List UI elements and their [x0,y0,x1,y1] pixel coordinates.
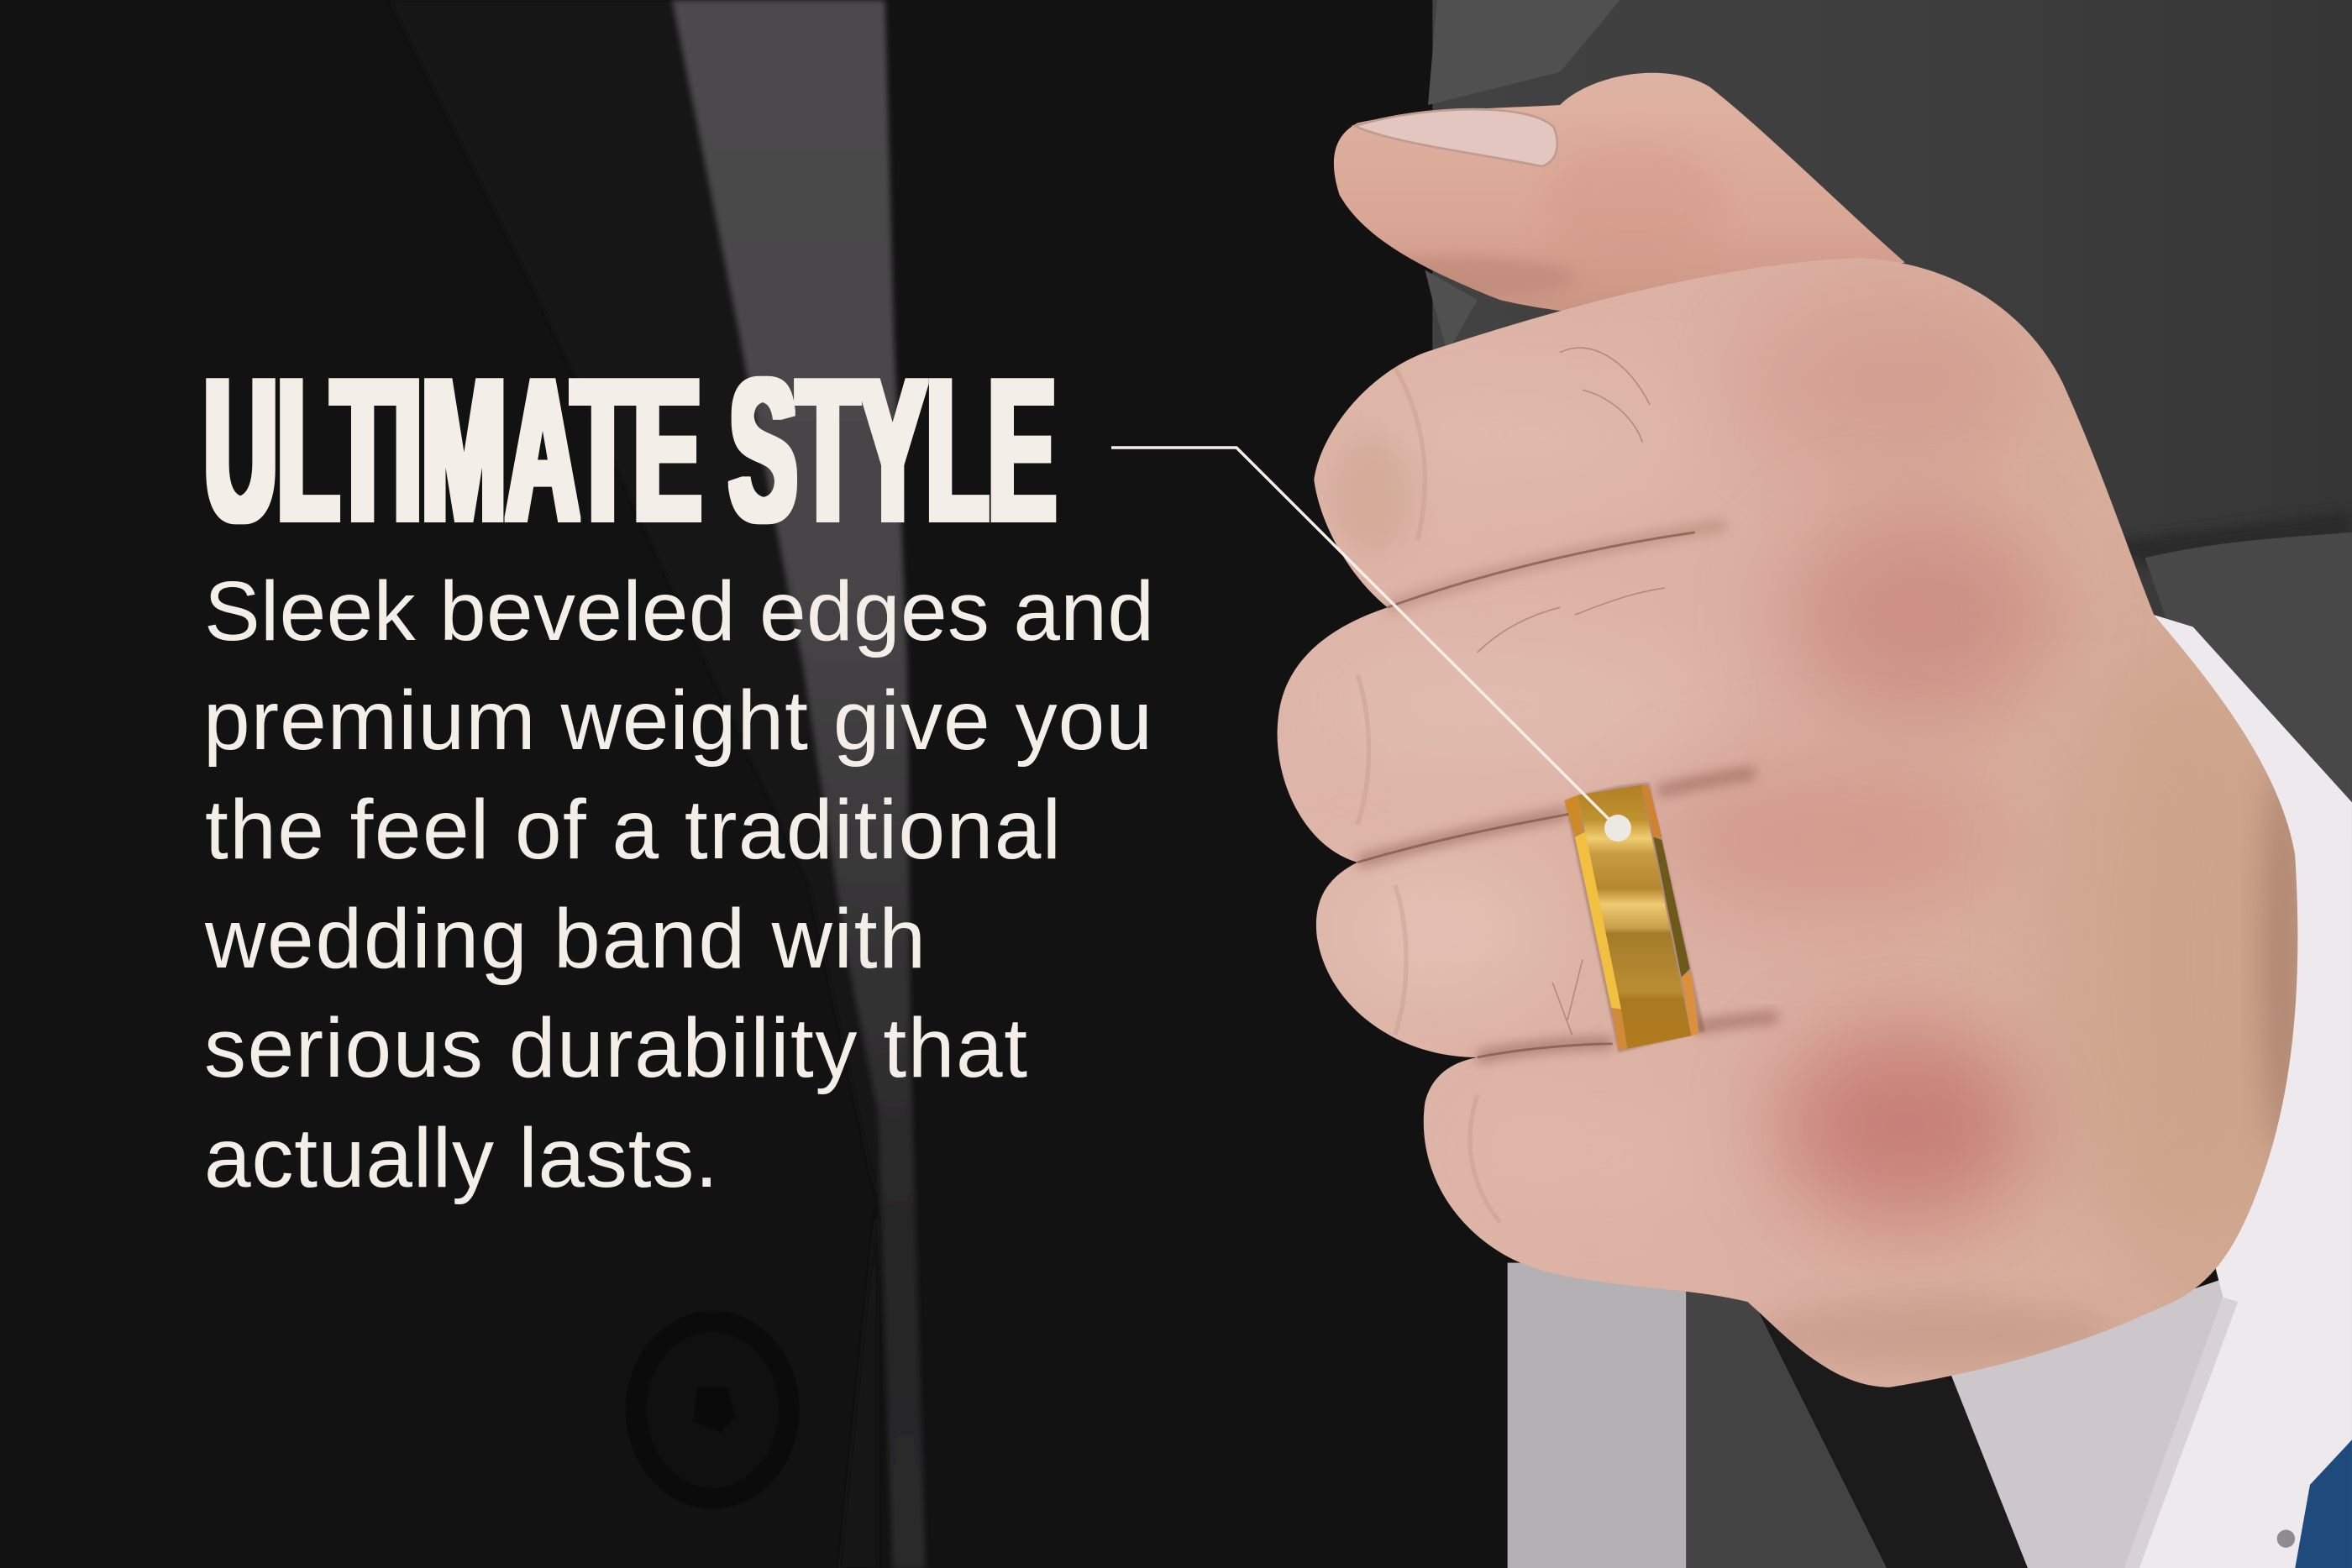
left jacket lapel [390,0,878,1568]
lower shirt strip [1508,1263,1688,1568]
right bevel top [1641,785,1662,837]
grey lapel top [1428,0,1620,105]
hand with thumb [1278,60,2304,1387]
left bevel yellow [1575,832,1621,1009]
shirt strip [672,0,926,1568]
gold ring [1565,783,1705,1052]
inner shirt [1950,1275,2235,1568]
left bevel top [1565,795,1583,837]
thumb [1334,72,1905,311]
shadow above sleeve [2100,510,2352,567]
body text [203,564,1154,1205]
finger shadows [1388,525,1725,607]
right bevel bottom [1682,972,1699,1036]
line [1111,448,1618,828]
line 3: the feel of a traditional [205,783,1061,877]
grey suit on right [1432,0,2352,780]
thumbnail [1354,109,1557,166]
skin shading [1320,292,2304,1371]
line 6: actually lasts. [204,1111,718,1205]
callout leader line [1111,448,1631,842]
line 1: Sleek beveled edges and [204,564,1154,658]
lower dark jacket [1747,1290,2028,1568]
cufflink blue [2295,1440,2352,1568]
right bevel dark [1653,837,1690,977]
brushed centre [1578,785,1691,1049]
line 5: serious durability that [204,1001,1027,1095]
white cuff [2124,615,2352,1568]
sleeve [2145,532,2352,840]
heading: ULTIMATE STYLE [204,338,1056,564]
grey lapel edge behind thumb [1425,270,1478,353]
wrinkles [1357,367,1500,1222]
back of hand [1278,258,2297,1387]
cufflink silver [2277,1529,2295,1548]
line 2: premium weight give you [203,674,1152,768]
jacket button [626,1311,800,1508]
ring shadow [1565,783,1705,1052]
line 4: wedding band with [204,892,926,986]
ring marker dot [1604,815,1631,842]
cuff fold shadow [2124,1298,2238,1568]
finger creases [1357,532,1695,1057]
left bevel bottom [1611,1008,1627,1050]
hairs [1478,348,1665,1035]
lower grey lapel [1686,1267,1887,1568]
